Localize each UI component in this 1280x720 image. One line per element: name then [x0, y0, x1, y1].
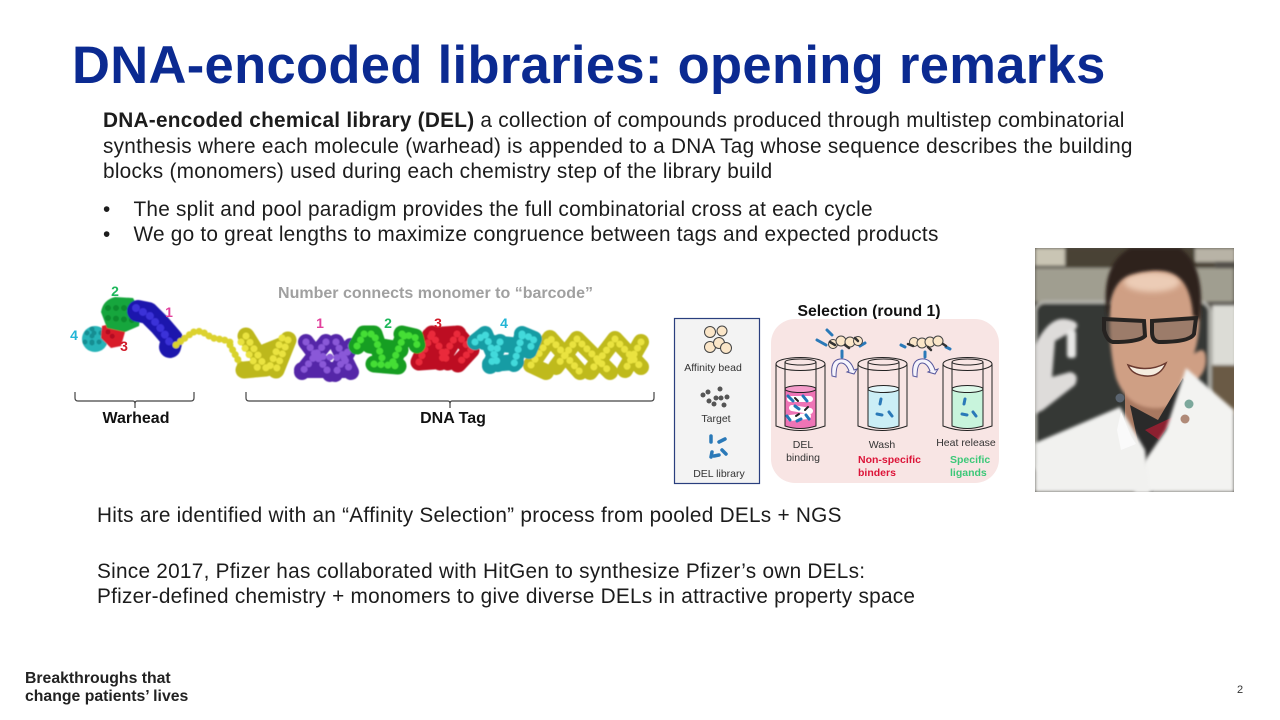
monomer numbers: 4: [500, 315, 508, 331]
coat: [1134, 368, 1234, 492]
bullet list: [103, 198, 939, 246]
specific ligands label: Specific: [950, 454, 990, 466]
glasses: [1104, 318, 1196, 342]
DNA purple segment: [302, 342, 351, 374]
definition text block: [103, 109, 1133, 183]
DNA tag bracket: [246, 392, 654, 408]
glove and vial: [1035, 319, 1077, 414]
monomer numbers: 1: [165, 304, 173, 320]
definition text block: DNA-encoded chemical library (DEL) a collection of compounds produced through multistep combinatorial: [103, 109, 1125, 132]
smile: [1128, 363, 1166, 376]
diagrams and photo canvas: [70, 248, 1243, 693]
neck: [1125, 391, 1168, 442]
hits text: Hits are identified with an “Affinity Selection” process from pooled DELs + NGS: [97, 504, 842, 527]
warhead monomer 4: cyan: [82, 326, 108, 352]
definition text block: synthesis where each molecule (warhead) is appended to a DNA Tag whose sequence describes the building: [103, 134, 1133, 158]
DNA yellow segment right: [531, 338, 641, 372]
cylinder: wash: [858, 358, 907, 430]
footer tagline: [25, 670, 188, 705]
monomer numbers: 2: [111, 283, 119, 299]
Pfizer collaboration text: [97, 560, 915, 608]
icon: affinity beads: [704, 326, 732, 354]
bead complex 2: [901, 336, 950, 357]
legend panel: Affinity bead: [684, 362, 742, 374]
background lab: [1035, 248, 1236, 472]
arrow 1: [832, 359, 857, 377]
selection heading: Selection (round 1): [797, 303, 941, 320]
warhead label: Warhead: [103, 410, 169, 427]
face: [1110, 268, 1206, 408]
non-specific binders label: binders: [858, 467, 896, 479]
coat badges: [1184, 400, 1194, 408]
hair: [1106, 248, 1201, 322]
warhead monomer 3: red: [101, 323, 125, 348]
definition text block: blocks (monomers) used during each chemistry step of the library build: [103, 160, 772, 183]
footer tagline: change patients’ lives: [25, 688, 188, 705]
molecule: warhead and DNA tag: [82, 297, 641, 374]
arrow 2: [913, 359, 938, 377]
caption: number connects monomer to barcode: Number connects monomer to “barcode”: [278, 285, 593, 302]
bullet list: • We go to great lengths to maximize congruence between tags and expected products: [103, 223, 939, 246]
monomer numbers: 1: [316, 315, 324, 331]
DNA red segment: [419, 334, 471, 364]
icon: target: [700, 386, 730, 408]
step labels: Wash: [869, 439, 895, 451]
monomer numbers: 4: [70, 327, 78, 343]
Pfizer collaboration text: Pfizer-defined chemistry + monomers to give diverse DELs in attractive property space: [97, 585, 915, 608]
photo: scientist holding a vial: [1035, 248, 1236, 498]
step labels: Heat release: [936, 437, 996, 449]
page number: 2: [1237, 684, 1243, 696]
monomer numbers: 2: [384, 315, 392, 331]
DNA green segment: [357, 334, 417, 366]
warhead monomer 2: green: [101, 297, 141, 332]
step labels: DEL: [793, 439, 813, 451]
legend panel: DEL library: [693, 468, 746, 480]
monomer numbers: 3: [120, 338, 128, 354]
legend panel: Target: [701, 413, 731, 425]
Pfizer collaboration text: Since 2017, Pfizer has collaborated with HitGen to synthesize Pfizer’s own DELs:: [97, 560, 865, 583]
footer tagline: Breakthroughs that: [25, 670, 171, 687]
non-specific binders label: Non-specific: [858, 454, 921, 466]
step labels: binding: [786, 452, 820, 464]
specific ligands label: ligands: [950, 467, 987, 479]
monomer numbers: [70, 283, 508, 354]
DNA yellow segment left: [230, 336, 288, 371]
DNA tag label: DNA Tag: [420, 410, 486, 427]
shirt collar: [1130, 378, 1184, 492]
cylinder: heat release: [943, 358, 992, 430]
DNA cyan segment: [475, 334, 534, 366]
bead complex 1: [817, 330, 865, 357]
legend panel: [674, 318, 760, 484]
warhead monomer 1: blue: [136, 308, 172, 347]
title: DNA-encoded libraries: opening remarks: [72, 36, 1106, 95]
selection panel: [771, 319, 999, 483]
cylinder: DEL binding: [776, 358, 825, 430]
warhead bracket: [75, 392, 194, 408]
icon: DEL library: [711, 436, 726, 457]
yellow linker: [176, 331, 232, 345]
bullet list: • The split and pool paradigm provides the full combinatorial cross at each cycle: [103, 198, 873, 221]
monomer numbers: 3: [434, 315, 442, 331]
step labels: [786, 437, 996, 464]
